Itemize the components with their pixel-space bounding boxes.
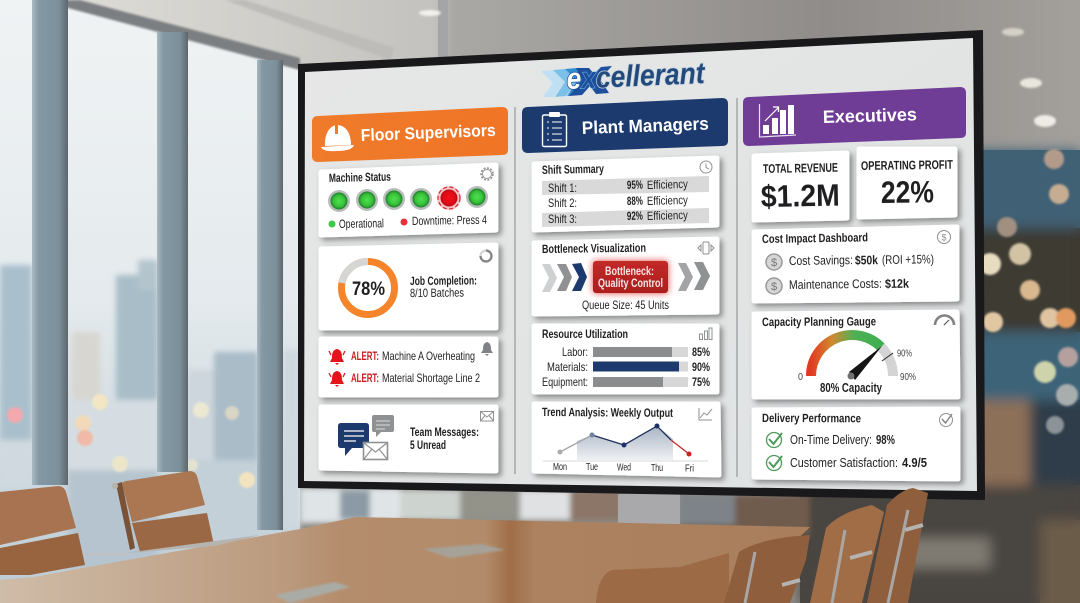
- icon: clipboard: [542, 112, 566, 146]
- chairs: right foreground: [596, 488, 928, 603]
- header: Floor Supervisors: Floor Supervisors: [360, 121, 496, 145]
- callout: Bottleneck Quality Control: [593, 261, 668, 293]
- card: Total Revenue: TOTAL REVENUE: [763, 161, 838, 176]
- chair: left foreground: [0, 486, 85, 575]
- row: Maintenance Costs: [766, 277, 909, 294]
- line chart: weekly output: Wed: [617, 462, 631, 474]
- gauge: 80% capacity: 90%: [900, 372, 916, 383]
- card: Bottleneck Visualization: [534, 239, 717, 314]
- row: Shift 3: Shift 3:: [548, 212, 577, 226]
- card: Capacity Planning Gauge: Capacity Planning Gauge: [762, 314, 876, 329]
- line chart: weekly output: Fri: [685, 464, 694, 474]
- row: Cost Savings: [766, 252, 934, 270]
- row: Maintenance Costs: $: [771, 281, 777, 293]
- bar: Equipment 75%: Equipment:: [542, 375, 588, 389]
- card: Total Revenue: [754, 153, 847, 220]
- gauge: 80% capacity: 80% Capacity: [820, 381, 882, 395]
- icon: small envelope: [480, 412, 494, 421]
- card: Machine Status: Machine Status: [329, 170, 391, 185]
- icon: growth chart: [760, 104, 796, 137]
- status lights: [328, 186, 488, 212]
- card: Operating Profit: OPERATING PROFIT: [861, 158, 953, 173]
- row: Customer Satisfaction: 4.9/5: [902, 456, 927, 470]
- callout: Bottleneck Quality Control: Quality Control: [598, 276, 663, 290]
- legend: Operational: [339, 216, 384, 231]
- row: Customer Satisfaction: Customer Satisfaction:: [790, 456, 898, 470]
- dashboard screen: [304, 38, 977, 491]
- card: Cost Impact Dashboard: Cost Impact Dashboard: [762, 230, 868, 246]
- chevrons in: [542, 263, 587, 292]
- card: Total Revenue: $1.2M: [761, 178, 840, 214]
- row: Maintenance Costs: Maintenance Costs:: [789, 277, 882, 292]
- chair: second left: [86, 471, 260, 555]
- panel: Plant Managers column: [522, 98, 728, 475]
- alert row 1: [329, 349, 475, 365]
- row: On-Time Delivery: 98%: [876, 433, 895, 447]
- column dividers: [515, 98, 737, 477]
- icon: line chart: [699, 408, 712, 420]
- header: Floor Supervisors: [312, 107, 508, 162]
- conference table: [0, 517, 810, 603]
- icon: mini gauge: [935, 316, 954, 325]
- alert row 1: Machine A Overheating: [382, 349, 475, 363]
- alert row 2: Material Shortage Line 2: [382, 371, 480, 385]
- row: Maintenance Costs: $12k: [885, 277, 909, 291]
- card: Job Completion: 8/10 Batches: [410, 286, 464, 300]
- bar: Materials 90%: Materials:: [547, 360, 588, 374]
- icon: flow: [698, 242, 714, 254]
- panel: Floor Supervisors column: [312, 107, 508, 471]
- card: Machine Status: [321, 165, 496, 235]
- chevrons out: [678, 262, 710, 291]
- line chart: weekly output: Mon: [553, 462, 567, 473]
- card: Shift Summary: [534, 158, 717, 230]
- card: Trend Analysis: Trend Analysis: Weekly Output: [542, 405, 673, 420]
- alert row 2: [329, 371, 480, 387]
- row: Shift 1: 95%: [627, 178, 643, 192]
- card: Team Messages: 5 Unread: [410, 438, 446, 452]
- line chart: weekly output: Tue: [586, 462, 598, 473]
- icon: gray bell: [481, 342, 493, 356]
- row: Cost Savings: Cost Savings:: [789, 253, 853, 268]
- row: Cost Savings: $50k: [855, 253, 878, 267]
- card: Team Messages: Team Messages:: [410, 425, 479, 439]
- row: Shift 2: 88%: [627, 194, 643, 208]
- icon: dollar: $: [942, 232, 947, 242]
- donut chart: 78%: 78%: [352, 279, 385, 300]
- donut chart: 78%: [342, 262, 394, 314]
- panel: Executives column: [743, 87, 966, 479]
- legend: [328, 213, 487, 231]
- row: Shift 1: Shift 1:: [548, 181, 577, 195]
- callout: Bottleneck Quality Control: Bottleneck:: [605, 264, 654, 278]
- gauge: 80% capacity: 90%: [897, 348, 912, 360]
- bar: Labor 85%: Labor:: [562, 345, 588, 359]
- bar: Equipment 75%: [542, 375, 710, 389]
- row: Shift 3: 92%: [627, 209, 643, 223]
- icon: bars: [700, 328, 712, 340]
- row: Shift 2: [548, 193, 688, 210]
- line chart: weekly output: [543, 424, 708, 474]
- bar: Labor 85%: [562, 345, 710, 359]
- monitor frame: [298, 30, 985, 500]
- logo: excellerant: excellerant: [566, 57, 707, 96]
- bar: Materials 90%: 90%: [692, 360, 710, 374]
- header: Executives: [743, 87, 966, 146]
- card: Job Completion: Job Completion:: [410, 273, 477, 288]
- row: Shift 3: [548, 208, 688, 226]
- card: Cost Impact Dashboard: [754, 227, 957, 301]
- card: Job Completion: [321, 245, 496, 328]
- header: Plant Managers: Plant Managers: [581, 114, 709, 138]
- icon: clock: [700, 161, 712, 173]
- icon: dollar: [938, 230, 950, 244]
- row: Shift 3: Efficiency: [647, 208, 688, 223]
- bar: Equipment 75%: 75%: [692, 375, 710, 389]
- row: Cost Savings: $: [771, 257, 777, 269]
- bar: Labor 85%: 85%: [692, 345, 710, 359]
- card: Capacity Planning Gauge: [754, 312, 958, 397]
- row: Shift 1: Efficiency: [647, 177, 688, 192]
- row: Shift 2: Efficiency: [647, 193, 688, 208]
- card: Delivery Performance: [754, 409, 958, 479]
- row: Shift 1: [548, 177, 688, 195]
- alert row 2: ALERT:: [351, 371, 379, 385]
- line chart: weekly output: Thu: [651, 463, 663, 474]
- alert row 1: ALERT:: [351, 349, 379, 363]
- icon: gray check: [940, 414, 952, 426]
- card: Resource Utilization: [534, 326, 717, 392]
- row: On-Time Delivery: On-Time Delivery:: [790, 433, 872, 447]
- bar: Materials 90%: [547, 360, 710, 374]
- card: Shift Summary: Shift Summary: [542, 162, 604, 177]
- card: Operating Profit: 22%: [881, 174, 934, 210]
- card: Operating Profit: [859, 149, 955, 217]
- icon: hard hat: [321, 125, 354, 151]
- card: Bottleneck Visualization: Queue Size: 45 Units: [582, 298, 669, 312]
- icon: message bubbles: [338, 415, 394, 460]
- icon: gear: [481, 168, 493, 180]
- card: Delivery Performance: Delivery Performance: [762, 411, 861, 425]
- card: Alerts: [321, 339, 496, 395]
- gauge: 80% capacity: 0: [798, 372, 803, 383]
- card: Resource Utilization: Resource Utilization: [542, 327, 628, 341]
- card: Team Messages: [321, 407, 496, 471]
- card: Trend Analysis: [534, 404, 719, 475]
- header: Executives: Executives: [823, 104, 917, 127]
- row: Cost Savings: (ROI +15%): [882, 252, 934, 267]
- card: Bottleneck Visualization: Bottleneck Visualization: [542, 241, 646, 256]
- header: Plant Managers: [522, 98, 728, 153]
- legend: Downtime: Press 4: [412, 213, 487, 228]
- gauge: 80% capacity: [798, 335, 916, 395]
- row: Shift 2: Shift 2:: [548, 196, 577, 210]
- icon: small ring: [480, 250, 492, 262]
